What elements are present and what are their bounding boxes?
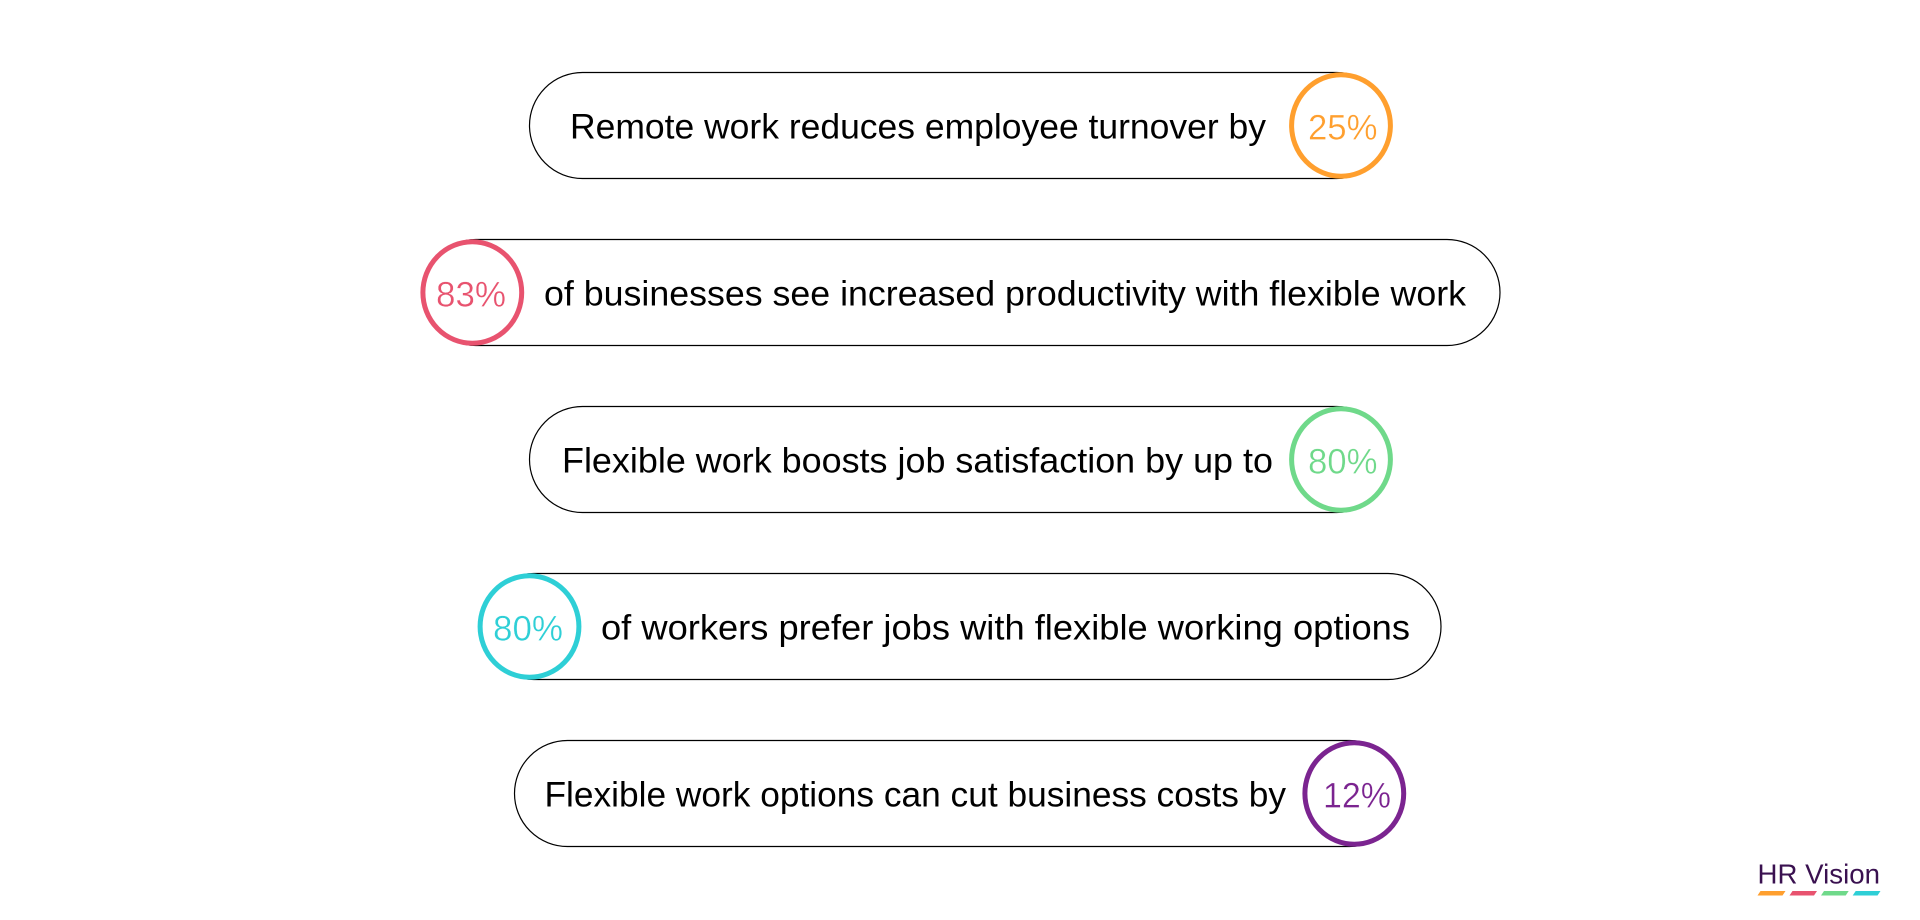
statement text: Remote work reduces employee turnover by: [570, 108, 1266, 147]
pill outline: [530, 406, 1390, 512]
statement text: of workers prefer jobs with flexible working options: [601, 609, 1410, 648]
badge value: 25%: 25%: [1308, 108, 1378, 147]
logo wordmark: HR Vision: [1758, 858, 1880, 890]
statement text: Flexible work boosts job satisfaction by up to: [562, 442, 1273, 481]
badge ring: purple: [1305, 743, 1404, 844]
badge value: 80%: 80%: [493, 609, 563, 648]
pill outline: [481, 574, 1441, 680]
pill outline: [423, 240, 1500, 346]
badge ring: orange: [1292, 75, 1390, 176]
badge value: 80%: 80%: [1308, 442, 1378, 481]
statement text: Flexible work options can cut business costs by: [544, 776, 1287, 815]
statement text: of businesses see increased productivity with flexible work: [544, 275, 1467, 314]
badge value: 83%: 83%: [436, 275, 506, 314]
pill outline: [514, 740, 1402, 846]
badge ring: green: [1292, 409, 1390, 510]
panel: business costs statistic: [514, 740, 1404, 846]
panel: job satisfaction statistic: [530, 406, 1390, 512]
pill outline: [530, 72, 1390, 178]
panel: employee turnover statistic: [530, 72, 1390, 178]
logo colour bars: [1758, 891, 1880, 896]
badge value: 12%: 12%: [1323, 776, 1391, 815]
badge ring: red: [423, 242, 522, 343]
badge ring: cyan: [480, 576, 579, 677]
panel: worker preference statistic: [480, 574, 1441, 680]
logo: HR Vision: [1758, 858, 1880, 896]
panel: productivity statistic: [423, 240, 1500, 346]
